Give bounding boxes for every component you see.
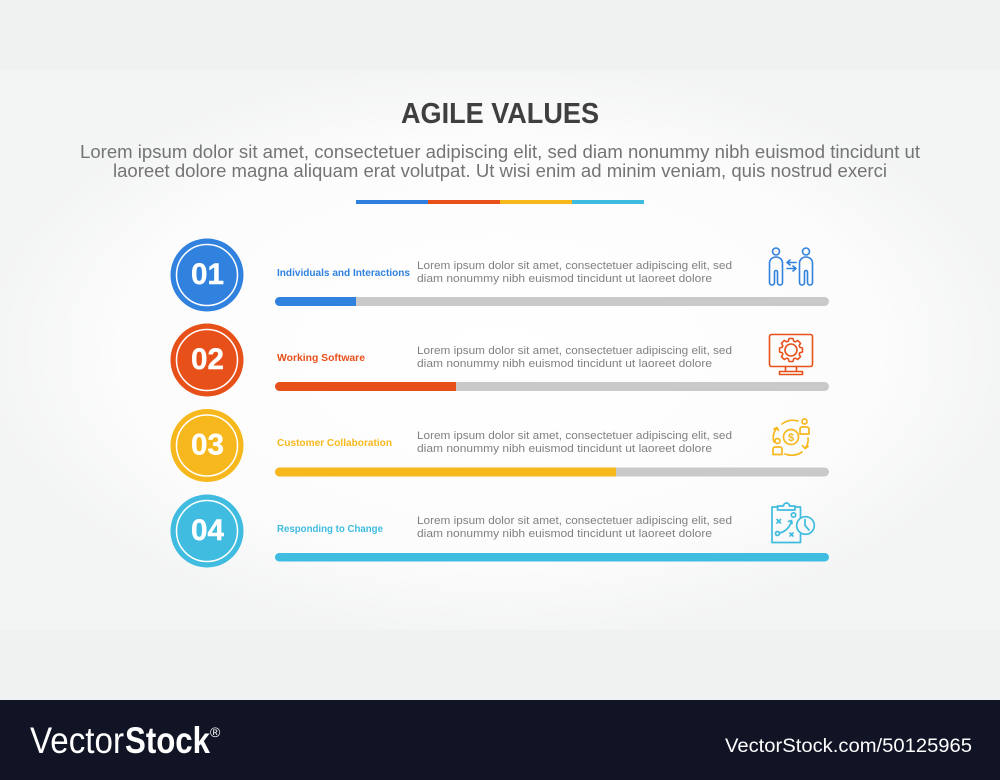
description: Lorem ipsum dolor sit amet, consectetuer adipiscing elit, sed <box>417 345 732 357</box>
footer logo: ® <box>210 724 221 740</box>
subtitle text block: Lorem ipsum dolor sit amet, consectetuer adipiscing elit, sed diam nonummy nibh euismod tincidunt ut <box>80 142 920 162</box>
description: diam nonummy nibh euismod tincidunt ut laoreet dolore <box>417 528 712 540</box>
number badge 04 <box>170 494 244 568</box>
description <box>417 260 732 285</box>
icon: money exchange between people: $ <box>788 432 794 444</box>
heading: Working Software <box>277 352 365 364</box>
heading: Individuals and Interactions <box>277 267 410 279</box>
number badge 02 <box>170 324 244 396</box>
description: diam nonummy nibh euismod tincidunt ut laoreet dolore <box>417 273 712 285</box>
progress bar <box>275 553 829 562</box>
row 1: Individuals and Interactions <box>170 238 829 312</box>
icon: monitor with gear <box>770 334 812 374</box>
footer logo <box>30 720 221 761</box>
footer logo: Vector <box>30 720 124 761</box>
icon: money exchange between people <box>773 419 809 455</box>
description: diam nonummy nibh euismod tincidunt ut laoreet dolore <box>417 358 712 370</box>
icon: two people exchanging <box>770 248 812 285</box>
description <box>417 345 732 370</box>
description: Lorem ipsum dolor sit amet, consectetuer adipiscing elit, sed <box>417 260 732 272</box>
heading: Customer Collaboration <box>277 437 392 449</box>
number badge 01: 01 <box>191 258 224 291</box>
description <box>417 515 732 540</box>
icon: clipboard strategy with clock <box>772 503 814 542</box>
description: diam nonummy nibh euismod tincidunt ut laoreet dolore <box>417 443 712 455</box>
footer band <box>0 700 1000 780</box>
number badge 03: 03 <box>191 428 224 462</box>
description: Lorem ipsum dolor sit amet, consectetuer adipiscing elit, sed <box>417 430 732 442</box>
subtitle text block: laoreet dolore magna aliquam erat volutpat. Ut wisi enim ad minim veniam, quis nostrud exerci <box>113 161 887 181</box>
progress bar <box>275 297 829 306</box>
footer image id: VectorStock.com/50125965 <box>725 736 972 757</box>
description <box>417 430 732 455</box>
row 4: Responding to Change <box>170 494 829 568</box>
title: AGILE VALUES <box>401 98 599 130</box>
number badge 02: 02 <box>191 343 224 376</box>
number badge 03 <box>170 409 244 482</box>
footer logo: Stock <box>125 720 210 761</box>
four-colour title rule <box>356 200 644 204</box>
row 3: Customer Collaboration <box>170 409 829 482</box>
number badge 01 <box>170 238 244 312</box>
description: Lorem ipsum dolor sit amet, consectetuer adipiscing elit, sed <box>417 515 732 527</box>
progress bar <box>275 382 829 391</box>
subtitle text block <box>80 142 920 181</box>
row 2: Working Software <box>170 324 829 396</box>
heading: Responding to Change <box>277 523 383 535</box>
number badge 04: 04 <box>191 514 224 547</box>
progress bar <box>275 468 829 476</box>
